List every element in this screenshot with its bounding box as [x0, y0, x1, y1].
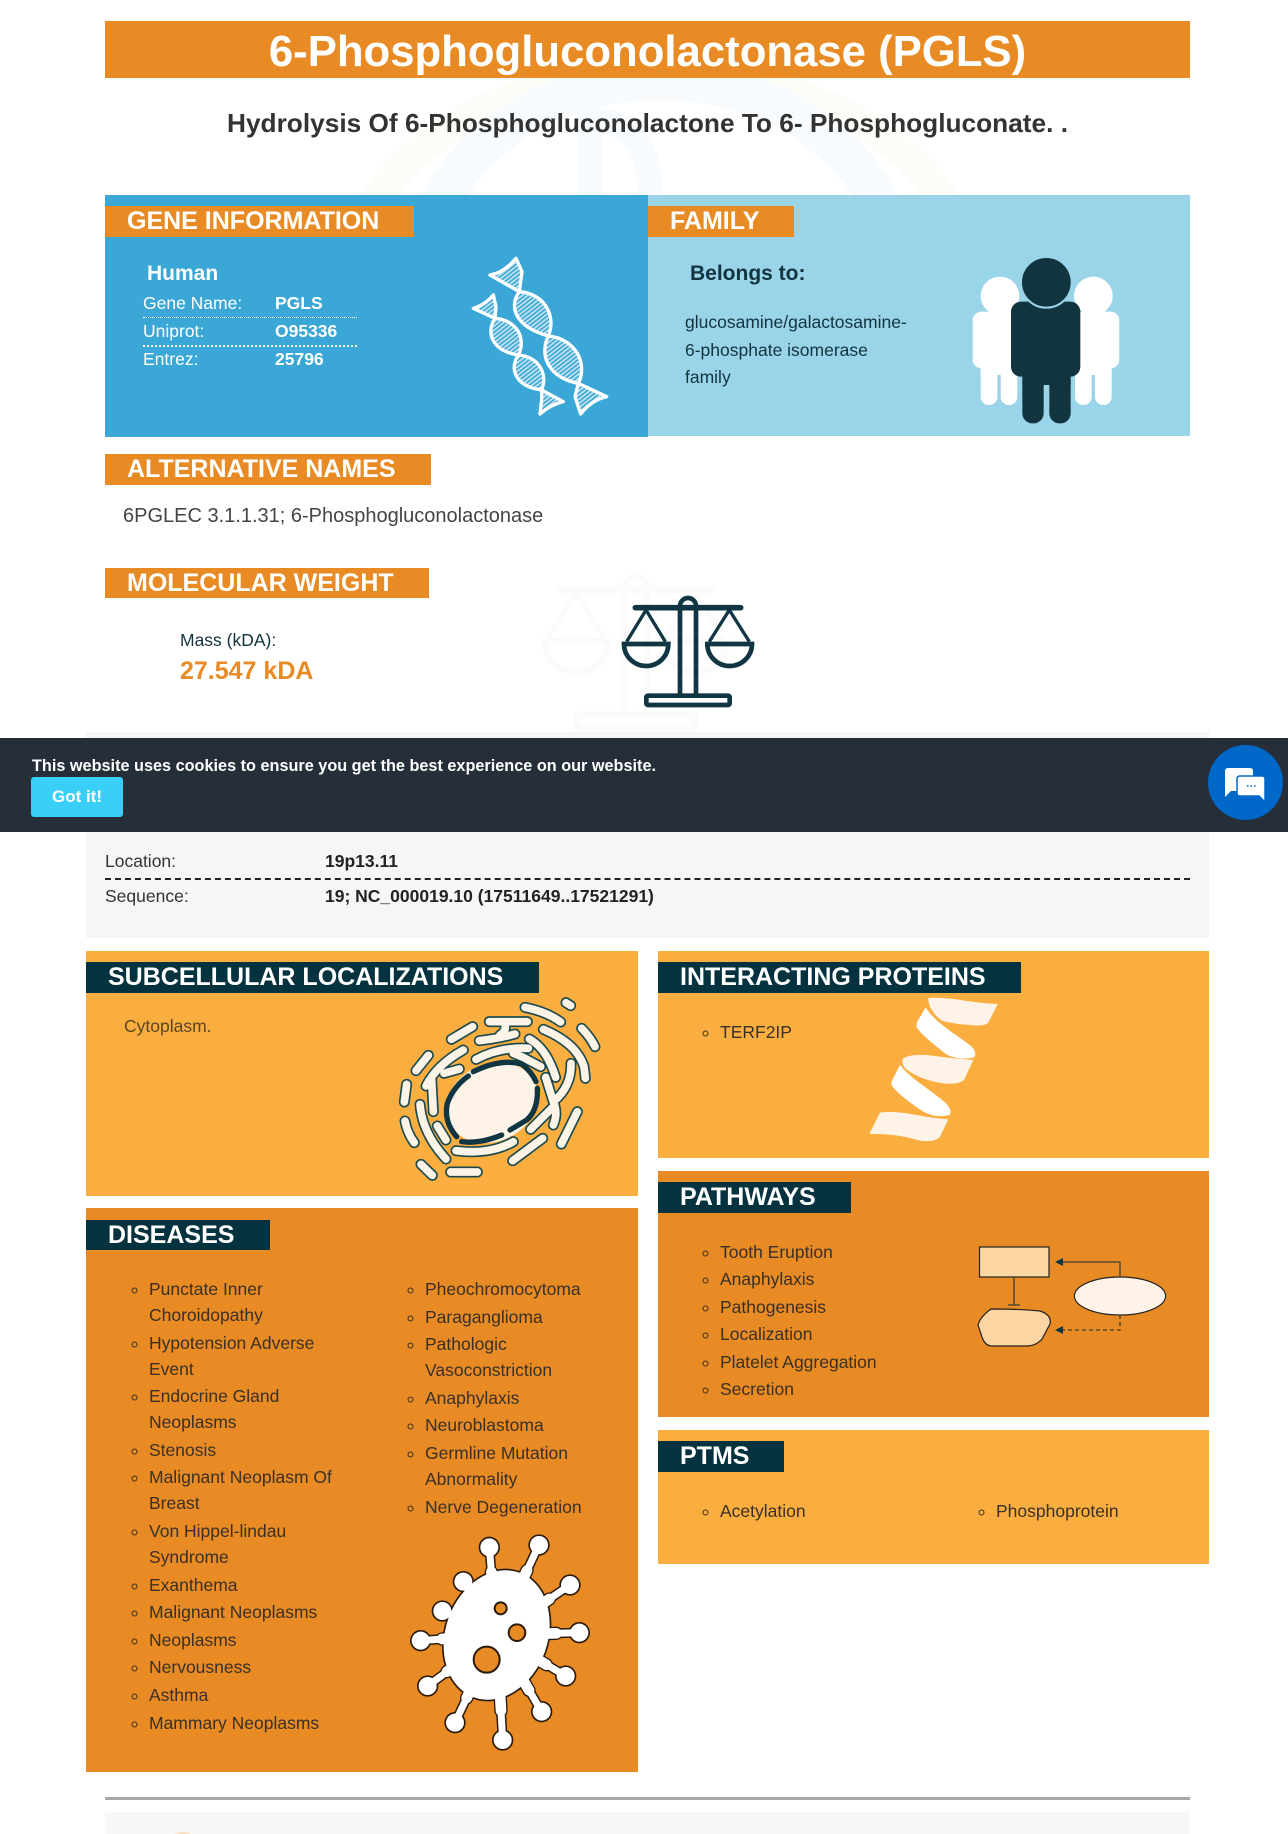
icon: balance scale: [622, 596, 754, 708]
disease list: column one: Exanthema: [149, 1575, 238, 1595]
mass label: Mass (kDA):: [180, 630, 276, 650]
icon: cell with organelles: [398, 997, 600, 1181]
disease list: column one: Choroidopathy: [149, 1305, 263, 1325]
panel: gene location: [86, 732, 1209, 938]
panel: PTMs: [658, 1430, 1209, 1564]
panel: family: [648, 195, 1190, 436]
sequence row: Sequence:: [105, 886, 189, 906]
entrez row: Entrez:: [143, 349, 198, 369]
disease list: column two: Paraganglioma: [425, 1307, 543, 1327]
icon: people: [972, 258, 1120, 424]
heading: diseases: DISEASES: [108, 1221, 234, 1249]
cookie button: Got it!: [52, 787, 102, 806]
pathway diagram: [977, 1246, 1166, 1347]
pathway list: Secretion: [720, 1379, 794, 1399]
gene name row: Gene Name:: [143, 293, 242, 313]
heading: interacting proteins: INTERACTING PROTEINS: [680, 963, 986, 991]
species label: Human: [147, 262, 218, 285]
heading: diseases: [86, 1220, 270, 1250]
footer panel: [105, 1812, 1190, 1834]
heading: pathways: PATHWAYS: [680, 1183, 816, 1211]
panel: gene information: [105, 195, 648, 437]
belongs to label: Belongs to:: [690, 262, 806, 285]
disease list: column two: Vasoconstriction: [425, 1360, 552, 1380]
disease list: column two: Germline Mutation: [425, 1443, 568, 1463]
pathway list: Tooth Eruption: [720, 1242, 833, 1262]
icon: chat button: [1208, 745, 1283, 820]
disease list: column two: Neuroblastoma: [425, 1415, 544, 1435]
disease list: column one: Mammary Neoplasms: [149, 1713, 319, 1733]
family description: family: [685, 367, 731, 387]
location row: Location:: [105, 851, 176, 871]
disease list: column one: Nervousness: [149, 1657, 251, 1677]
disease list: column one: Asthma: [149, 1685, 208, 1705]
footer logo top: [173, 1832, 193, 1834]
entrez row: 25796: [275, 349, 324, 369]
title: [105, 21, 1190, 78]
uniprot row: Uniprot:: [143, 321, 204, 341]
disease list: column two: Anaphylaxis: [425, 1388, 519, 1408]
uniprot row: [143, 321, 337, 341]
heading: PTMs: [658, 1441, 784, 1472]
PTM list: column two: Phosphoprotein: [996, 1501, 1119, 1521]
disease list: column two: [408, 1279, 582, 1517]
interacting protein list: TERF2IP: [720, 1022, 792, 1042]
heading: molecular weight: MOLECULAR WEIGHT: [127, 569, 394, 597]
heading: family: FAMILY: [670, 207, 759, 235]
disease list: column two: Pathologic: [425, 1334, 507, 1354]
disease list: column two: Nerve Degeneration: [425, 1497, 582, 1517]
heading: family: [648, 206, 794, 237]
sequence row: 19; NC_000019.10 (17511649..17521291): [325, 886, 654, 906]
disease list: column one: Endocrine Gland: [149, 1386, 279, 1406]
mass value: 27.547 kDA: [180, 657, 313, 685]
alternative names text: 6PGLEC 3.1.1.31; 6-Phosphogluconolactonase: [123, 504, 543, 526]
title: 6-Phosphogluconolactonase (PGLS): [269, 27, 1026, 76]
panel: pathways: [658, 1171, 1209, 1417]
disease list: column one: Event: [149, 1359, 194, 1379]
panel: diseases: [86, 1208, 638, 1772]
disease list: column one: Malignant Neoplasm Of: [149, 1467, 332, 1487]
PTM list: column one: Acetylation: [720, 1501, 806, 1521]
panel: subcellular localizations: [86, 951, 638, 1196]
cookie banner: [0, 738, 1288, 832]
disease list: column one: Breast: [149, 1493, 200, 1513]
pathway list: [702, 1242, 877, 1399]
gene name row: [143, 293, 323, 313]
heading: gene information: GENE INFORMATION: [127, 207, 379, 235]
sequence row: [105, 886, 654, 906]
localization text: Cytoplasm.: [124, 1016, 212, 1036]
heading: pathways: [658, 1182, 851, 1213]
disease list: column two: Pheochromocytoma: [425, 1279, 581, 1299]
panel: interacting proteins: [658, 951, 1209, 1158]
family description: [685, 312, 907, 387]
subtitle: Hydrolysis Of 6-Phosphogluconolactone To 6- Phosphogluconate. .: [227, 108, 1068, 138]
heading: alternative names: ALTERNATIVE NAMES: [127, 455, 396, 483]
disease list: column one: Neoplasms: [149, 1412, 237, 1432]
icon: virus: [410, 1534, 590, 1751]
disease list: column one: Von Hippel-lindau: [149, 1521, 286, 1541]
disease list: column one: Punctate Inner: [149, 1279, 263, 1299]
heading: PTMs: PTMS: [680, 1442, 749, 1470]
pathway list: Anaphylaxis: [720, 1269, 814, 1289]
uniprot row: O95336: [275, 321, 337, 341]
cookie message: This website uses cookies to ensure you get the best experience on our website.: [32, 757, 656, 775]
entrez row: [143, 349, 324, 369]
disease list: column one: Neoplasms: [149, 1630, 237, 1650]
disease list: column two: Abnormality: [425, 1469, 517, 1489]
cookie button: [31, 777, 123, 817]
disease list: column one: Syndrome: [149, 1547, 229, 1567]
pathway list: Pathogenesis: [720, 1297, 826, 1317]
watermark logo: [362, 78, 958, 195]
location row: 19p13.11: [325, 851, 398, 871]
heading: subcellular localizations: SUBCELLULAR LOCALIZATIONS: [108, 963, 503, 991]
disease list: column one: Hypotension Adverse: [149, 1333, 314, 1353]
gene name row: PGLS: [275, 293, 323, 313]
icon: protein helix ribbon: [869, 998, 998, 1142]
location row: [105, 851, 398, 871]
pathway list: Localization: [720, 1324, 812, 1344]
icon: DNA helices: [472, 256, 608, 416]
disease list: column one: Stenosis: [149, 1440, 216, 1460]
pathway list: Platelet Aggregation: [720, 1352, 877, 1372]
family description: 6-phosphate isomerase: [685, 340, 868, 360]
disease list: column one: Malignant Neoplasms: [149, 1602, 317, 1622]
disease list: column one: [132, 1279, 332, 1733]
family description: glucosamine/galactosamine-: [685, 312, 907, 332]
